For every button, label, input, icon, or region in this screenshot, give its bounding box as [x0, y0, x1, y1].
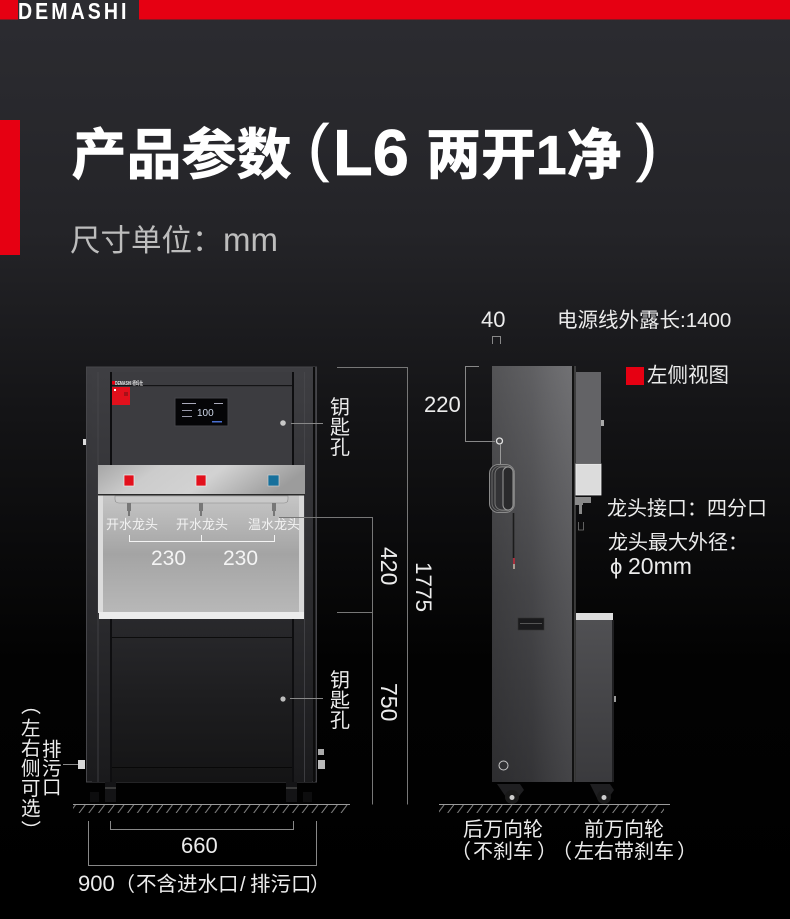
- front view overlay labels: 开水龙头: [176, 517, 228, 532]
- drain outlet label: 右: [21, 738, 41, 760]
- faucets: [127, 503, 131, 516]
- power cord length: 电源线外露长:1400: [557, 309, 731, 332]
- ground side: [439, 804, 670, 813]
- upper door: [112, 372, 292, 465]
- side view machine: [492, 366, 616, 804]
- subtitle: unit: mm: [223, 221, 278, 258]
- drain outlet label: 侧: [21, 758, 41, 780]
- height dimensions: 420: [376, 547, 402, 585]
- ground front: [73, 804, 350, 813]
- faucet diameter note: ϕ: [610, 554, 622, 579]
- drain outlet label: （: [18, 695, 42, 715]
- front view machine: DEMASHI 德玛仕: [115, 380, 143, 387]
- side vent: [518, 618, 544, 630]
- width dimensions: ）: [310, 873, 330, 896]
- drain outlet label: 口: [42, 777, 62, 799]
- drain outlet label: 选: [21, 798, 41, 820]
- logo strip on door: [112, 381, 115, 384]
- width dimensions: /: [240, 874, 246, 896]
- drain outlet label: 排: [42, 739, 62, 761]
- rear caster label: [451, 818, 557, 863]
- front view overlay labels: 230: [151, 547, 186, 570]
- keyhole callout upper: 孔: [330, 436, 350, 459]
- side casters: [497, 784, 614, 804]
- front caster label: 左右带刹车: [574, 840, 674, 863]
- white lip: [99, 612, 304, 619]
- front view overlay labels: [106, 517, 300, 570]
- width dimensions: 不含进水口: [136, 873, 238, 896]
- lower front section: [576, 620, 613, 782]
- rear caster label: 后万向轮: [463, 818, 543, 841]
- height dimensions: 1775: [411, 562, 436, 612]
- front caster label: ）: [677, 840, 697, 863]
- keyhole callout upper: 钥: [330, 396, 350, 419]
- faucet spacing bracket: [130, 535, 274, 542]
- front caster label: （: [552, 840, 572, 863]
- lower door: [112, 619, 292, 782]
- width dimensions: 排污口: [250, 873, 312, 896]
- front caster label: 前万向轮: [584, 818, 664, 841]
- rear caster label: 不刹车: [473, 840, 533, 863]
- cabinet frame: [86, 367, 316, 782]
- faucet connector note: 龙头接口：四分口: [607, 497, 767, 520]
- drain outlet label: 污: [42, 758, 62, 780]
- title: 两开1净: [426, 124, 622, 186]
- front caster label: [552, 818, 697, 863]
- keyhole callout upper: [291, 396, 350, 459]
- water recess: [98, 495, 304, 613]
- casters: [90, 782, 312, 802]
- title: [72, 113, 657, 189]
- side view legend: 左侧视图: [647, 364, 729, 387]
- faucet diameter note: 20mm: [628, 553, 692, 579]
- keyhole callout lower: 钥: [330, 669, 350, 692]
- 40 dimension: [481, 307, 505, 344]
- front view overlay labels: 230: [223, 547, 258, 570]
- drain outlet label: [18, 695, 78, 840]
- 220 dimension: [424, 366, 495, 442]
- width dimensions: [78, 821, 330, 896]
- red warning label: [112, 387, 130, 405]
- height dimensions: 750: [376, 683, 402, 721]
- width dimensions: （: [115, 873, 135, 896]
- keyhole callout lower: [290, 669, 350, 732]
- rear caster label: ）: [537, 840, 557, 863]
- upper keyhole: [280, 420, 286, 426]
- faucet diameter note: [608, 531, 748, 579]
- power cord: [490, 438, 514, 569]
- upper front section: [576, 372, 601, 463]
- control display: 100: [197, 408, 214, 419]
- 40 dimension: 40: [481, 307, 505, 332]
- keyhole callout lower: 孔: [330, 709, 350, 732]
- faucet buttons: [124, 475, 134, 486]
- width dimensions: 660: [181, 833, 218, 858]
- lower keyhole: [280, 696, 286, 702]
- side circle port: [499, 761, 508, 770]
- width dimensions: 900: [78, 871, 115, 896]
- silver control band: [98, 465, 305, 495]
- rear caster label: （: [451, 840, 471, 863]
- main body: [492, 366, 572, 782]
- red accent block: [0, 120, 20, 255]
- 220 dimension: 220: [424, 392, 461, 417]
- inlet and drain ports: [78, 760, 85, 769]
- control display: [175, 398, 228, 426]
- drain outlet label: 左: [21, 718, 41, 740]
- front view overlay labels: 开水龙头: [106, 517, 158, 532]
- subtitle: unit: 尺寸单位：: [70, 224, 222, 258]
- faucet diameter note: 龙头最大外径：: [608, 531, 748, 554]
- title: 产品参数: [72, 124, 292, 186]
- drain outlet label: ）: [18, 820, 42, 840]
- side faucet: [575, 497, 591, 514]
- title: L6: [333, 116, 409, 189]
- drain outlet label: 可: [21, 778, 41, 800]
- front view overlay labels: 温水龙头: [248, 517, 300, 532]
- title: (: [308, 113, 329, 183]
- height dimensions: [279, 368, 436, 804]
- keyhole callout upper: 匙: [330, 416, 350, 439]
- front view machine: [78, 367, 325, 802]
- faucet manifold: [115, 496, 288, 503]
- keyhole callout lower: 匙: [330, 689, 350, 712]
- title: ): [636, 113, 657, 183]
- top brand bar: [0, 0, 790, 24]
